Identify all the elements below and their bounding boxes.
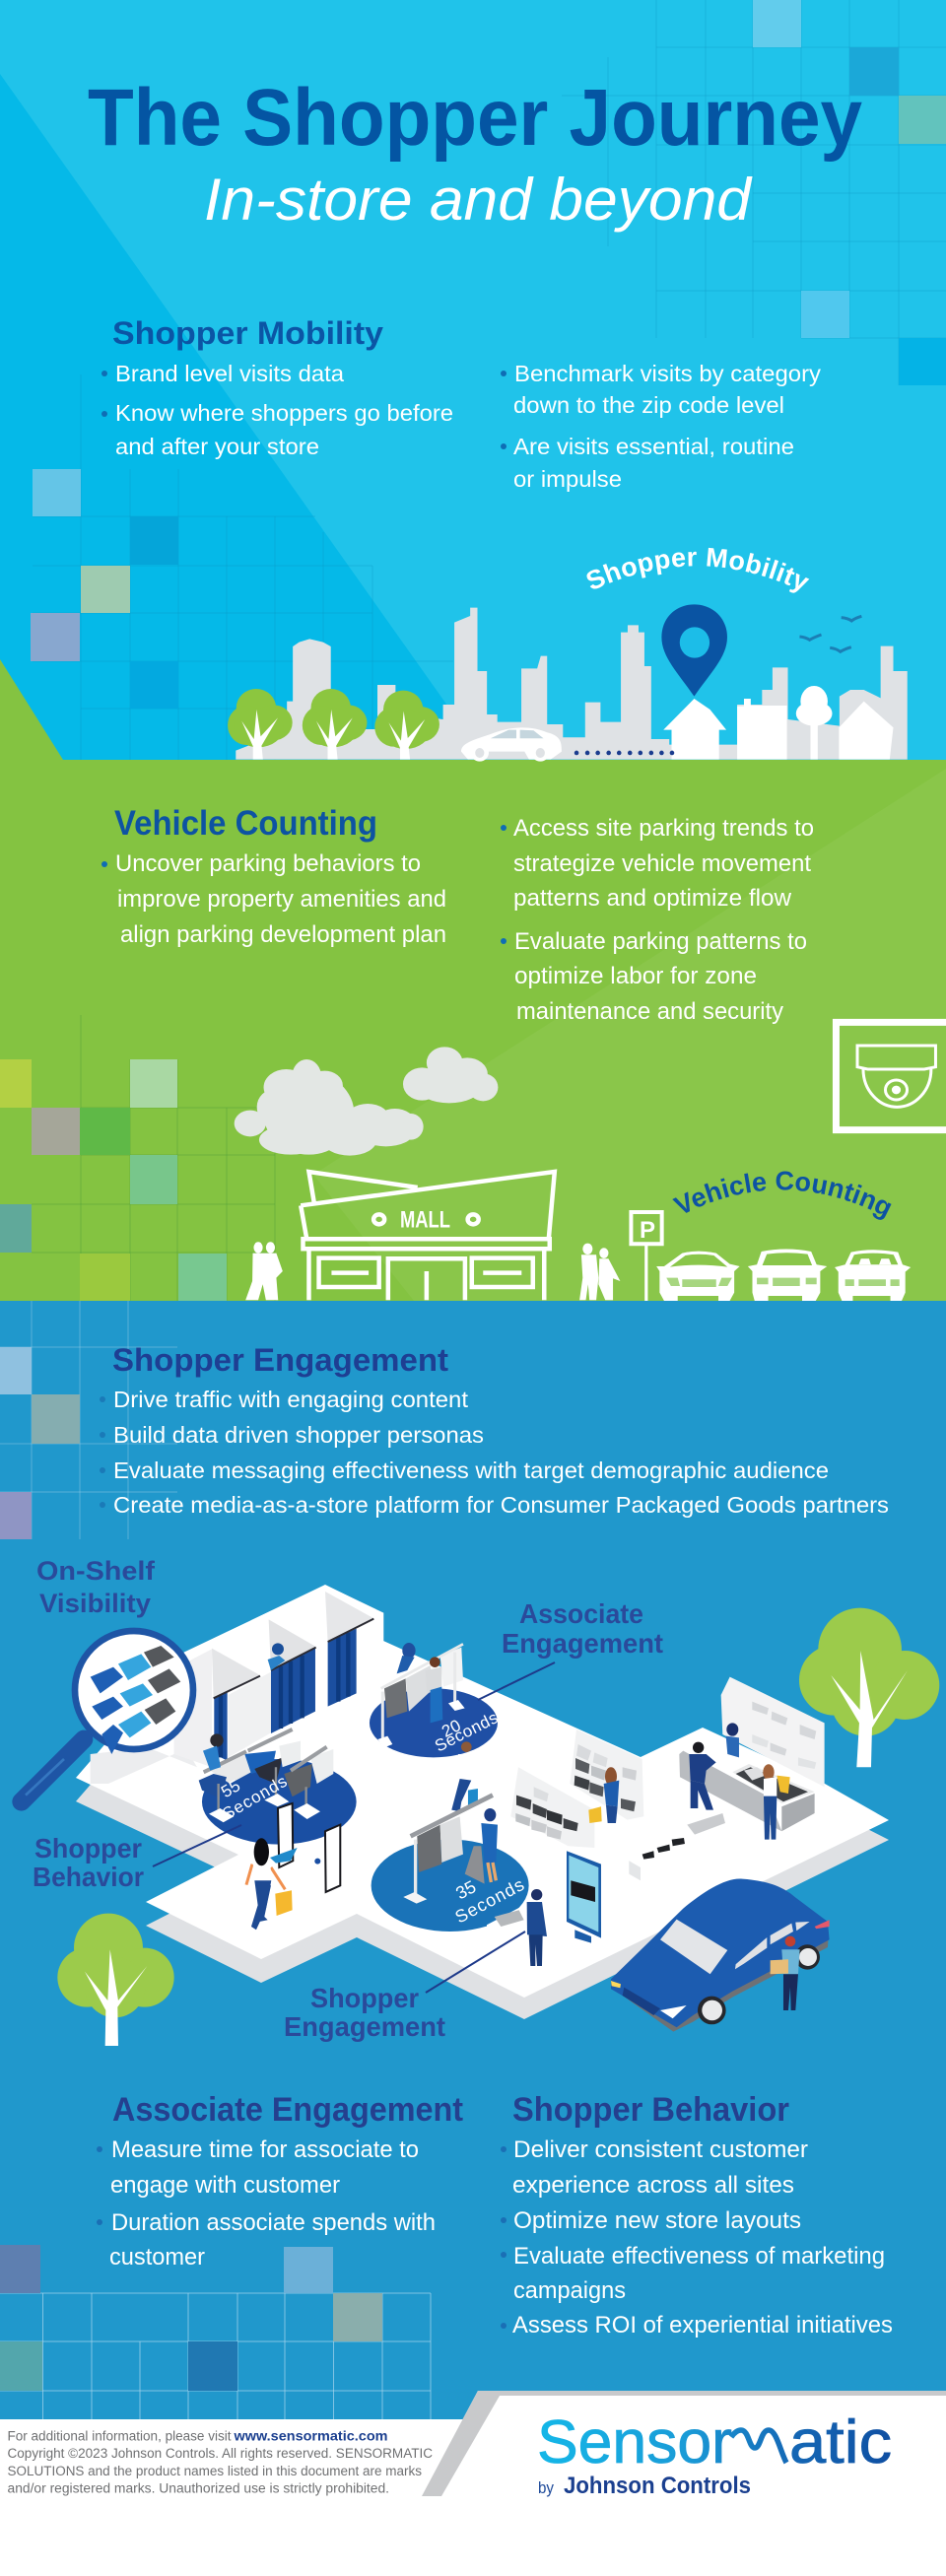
bearded associate <box>203 1733 224 1771</box>
people near parking <box>579 1244 620 1300</box>
cars <box>656 1249 911 1301</box>
floor label: 35 seconds <box>442 1856 528 1928</box>
icon: parking sign <box>631 1212 662 1301</box>
checkout counter <box>679 1751 815 1831</box>
icon: security camera <box>836 1022 946 1130</box>
text block: shopper mobility right bullets: or impulse <box>513 466 622 492</box>
text block: vehicle counting right bullets: Access site parking trends to <box>513 815 814 842</box>
text block: shopper behavior bullets: experience across all sites <box>512 2172 794 2199</box>
callout: shopper behavior: Behavior <box>33 1862 144 1892</box>
car <box>611 1879 830 2032</box>
text block: vehicle counting left bullets <box>101 850 446 948</box>
associate in suit <box>527 1889 547 1966</box>
text block: shopper behavior bullets: Deliver consistent customer <box>513 2136 808 2163</box>
callout: associate engagement <box>478 1598 663 1700</box>
label: mall: MALL <box>400 1206 450 1234</box>
floor label: 55 seconds <box>209 1754 291 1823</box>
store floor <box>76 1585 889 2019</box>
clothing racks near 55 seconds zone <box>199 1729 333 1822</box>
tree 3 <box>374 691 439 760</box>
text block: shopper engagement bullets <box>100 1387 889 1518</box>
route dots <box>574 751 674 755</box>
text block: shopper mobility left bullets <box>101 361 453 459</box>
text block: vehicle counting right bullets <box>501 815 814 1025</box>
tree: upper right <box>799 1608 939 1767</box>
shelf block front <box>510 1767 594 1848</box>
label: parking sign letter: P <box>640 1217 655 1244</box>
shopper with yellow bag <box>246 1838 298 1930</box>
tree: lower left <box>57 1914 174 2046</box>
shopper in 20 seconds zone <box>426 1657 442 1723</box>
location pin <box>661 604 727 697</box>
floor label: 55 seconds: Seconds <box>219 1771 291 1823</box>
illustration: parking scene <box>235 1022 946 1301</box>
heading: shopper mobility: Shopper Mobility <box>112 315 383 351</box>
floor label: 35 seconds: 35 <box>452 1876 479 1903</box>
callout: on-shelf visibility <box>36 1556 156 1618</box>
delivery person <box>771 1936 800 2010</box>
callout: shopper engagement <box>284 1932 525 2042</box>
text block: shopper mobility left bullets: Know where shoppers go before <box>115 400 453 426</box>
car <box>461 727 562 762</box>
text block: vehicle counting right bullets: patterns and optimize flow <box>513 885 792 912</box>
text block: associate engagement bullets: Measure time for associate to <box>111 2136 419 2163</box>
person in fitting room <box>268 1643 285 1670</box>
title: The Shopper Journey <box>88 73 862 163</box>
text block: vehicle counting left bullets: Uncover parking behaviors to <box>115 850 421 877</box>
subtitle: In-store and beyond <box>204 167 753 233</box>
floor label: 20 seconds: 20 <box>439 1716 464 1741</box>
illustration: city skyline <box>228 604 908 762</box>
text block: shopper mobility left bullets: Brand level visits data <box>115 361 344 386</box>
callout: shopper engagement: Shopper <box>310 1983 419 2013</box>
logo: Sensormatic by Johnson Controls: Johnson Controls <box>564 2473 751 2499</box>
tree 1 <box>228 689 293 760</box>
tree 2 <box>303 689 367 760</box>
footer legal text: SOLUTIONS and the product names listed in this document are marks <box>8 2464 422 2478</box>
text block: vehicle counting right bullets: maintenance and security <box>516 998 783 1025</box>
text block: vehicle counting right bullets: optimize labor for zone <box>514 963 757 989</box>
curved label: shopper mobility: Shopper Mobility <box>587 548 810 593</box>
text block: shopper mobility right bullets <box>501 361 822 492</box>
callout: shopper behavior <box>33 1825 241 1892</box>
footer legal text: and/or registered marks. Unauthorized use is strictly prohibited. <box>8 2481 389 2495</box>
curved label: vehicle counting: Vehicle Counting <box>672 1171 891 1220</box>
walking shopper <box>451 1741 478 1811</box>
text block: shopper engagement bullets: Evaluate messaging effectiveness with target demographic audience <box>113 1457 829 1483</box>
text block: shopper behavior bullets: Assess ROI of experiential initiatives <box>512 2312 893 2339</box>
cashier <box>726 1723 739 1757</box>
people left of mall <box>245 1242 283 1300</box>
callout: on-shelf visibility: On-Shelf <box>36 1556 156 1586</box>
magnifier <box>22 1631 193 1801</box>
text block: associate engagement bullets <box>97 2136 436 2271</box>
logo: Sensormatic by Johnson Controls: by <box>538 2478 554 2497</box>
text block: shopper mobility left bullets: and after your store <box>115 434 319 459</box>
footer legal text <box>8 2428 433 2495</box>
text block: shopper engagement bullets: Drive traffic with engaging content <box>113 1387 469 1412</box>
text block: shopper behavior bullets: campaigns <box>513 2277 626 2304</box>
heading: vehicle counting: Vehicle Counting <box>114 804 377 843</box>
text block: associate engagement bullets: engage with customer <box>110 2172 340 2199</box>
shelf block <box>570 1729 643 1820</box>
text block: shopper behavior bullets <box>501 2136 893 2339</box>
logo: Sensormatic by Johnson Controls <box>537 2408 892 2499</box>
text block: shopper engagement bullets: Create media-as-a-store platform for Consumer Packaged Goods partners <box>113 1492 889 1518</box>
floor label: 55 seconds: 55 <box>218 1776 243 1801</box>
icon: mall building <box>301 1172 555 1300</box>
woman in 35 seconds zone <box>465 1808 498 1884</box>
associate in 20 seconds zone <box>397 1643 416 1673</box>
display table 35 seconds <box>487 1905 564 1944</box>
text block: vehicle counting left bullets: align parking development plan <box>120 921 446 948</box>
houses <box>663 686 894 760</box>
text block: associate engagement bullets: customer <box>109 2244 205 2271</box>
floor zone: 35 seconds <box>372 1840 529 1932</box>
callout: shopper engagement: Engagement <box>284 2011 445 2042</box>
text block: associate engagement bullets: Duration associate spends with <box>111 2209 436 2236</box>
text block: shopper mobility right bullets: down to the zip code level <box>513 392 784 418</box>
callout: on-shelf visibility: Visibility <box>39 1589 151 1618</box>
text block: shopper mobility right bullets: Benchmark visits by category <box>514 361 822 386</box>
woman at counter <box>763 1764 790 1840</box>
text block: shopper mobility right bullets: Are visits essential, routine <box>513 434 794 459</box>
text block: vehicle counting right bullets: strategize vehicle movement <box>513 850 811 877</box>
panel: vehicle counting background <box>0 760 946 1301</box>
floor zone: 55 seconds <box>202 1759 357 1845</box>
callout: shopper behavior: Shopper <box>34 1833 142 1864</box>
heading: associate engagement: Associate Engagement <box>112 2091 463 2129</box>
floor zone: 20 seconds <box>370 1688 498 1757</box>
birds <box>799 616 861 651</box>
customer at counter <box>689 1742 716 1810</box>
text block: vehicle counting left bullets: improve property amenities and <box>117 886 446 913</box>
footer legal text: Copyright ©2023 Johnson Controls. All rights reserved. SENSORMATIC <box>8 2446 433 2461</box>
heading: shopper behavior: Shopper Behavior <box>512 2091 789 2129</box>
footer legal text: For additional information, please visit <box>8 2428 232 2444</box>
callout: associate engagement: Associate <box>519 1598 643 1629</box>
back wall display <box>721 1677 825 1787</box>
panel: in-store background <box>0 1301 946 2419</box>
floor label: 35 seconds: Seconds <box>451 1874 528 1928</box>
logo: Sensormatic by Johnson Controls: Sensor <box>537 2408 732 2476</box>
illustration: isometric store <box>22 1585 939 2046</box>
logo: Sensormatic by Johnson Controls: atic <box>789 2408 892 2476</box>
security gates <box>278 1803 340 1892</box>
clouds <box>235 1047 498 1156</box>
text block: shopper engagement bullets: Build data driven shopper personas <box>113 1422 484 1448</box>
skyline buildings <box>236 608 908 760</box>
footer panel <box>0 2391 946 2576</box>
woman browsing shelf <box>588 1767 619 1823</box>
text block: shopper behavior bullets: Optimize new store layouts <box>513 2207 801 2234</box>
floor label: 20 seconds: Seconds <box>432 1708 502 1756</box>
rack in 20 seconds zone <box>377 1644 465 1747</box>
footer legal text: www.sensormatic.com <box>233 2428 388 2444</box>
fitting rooms <box>91 1585 383 1784</box>
digital signage kiosk <box>567 1851 601 1943</box>
text block: vehicle counting right bullets: Evaluate parking patterns to <box>514 928 807 955</box>
text block: shopper behavior bullets: Evaluate effectiveness of marketing <box>513 2243 885 2270</box>
rack in 35 seconds zone <box>403 1796 493 1904</box>
display table with shoes <box>629 1813 734 1880</box>
callout: associate engagement: Engagement <box>502 1628 663 1659</box>
door sensor dot <box>314 1859 320 1864</box>
heading: shopper engagement: Shopper Engagement <box>112 1342 448 1378</box>
panel: shopper mobility background <box>0 0 946 761</box>
